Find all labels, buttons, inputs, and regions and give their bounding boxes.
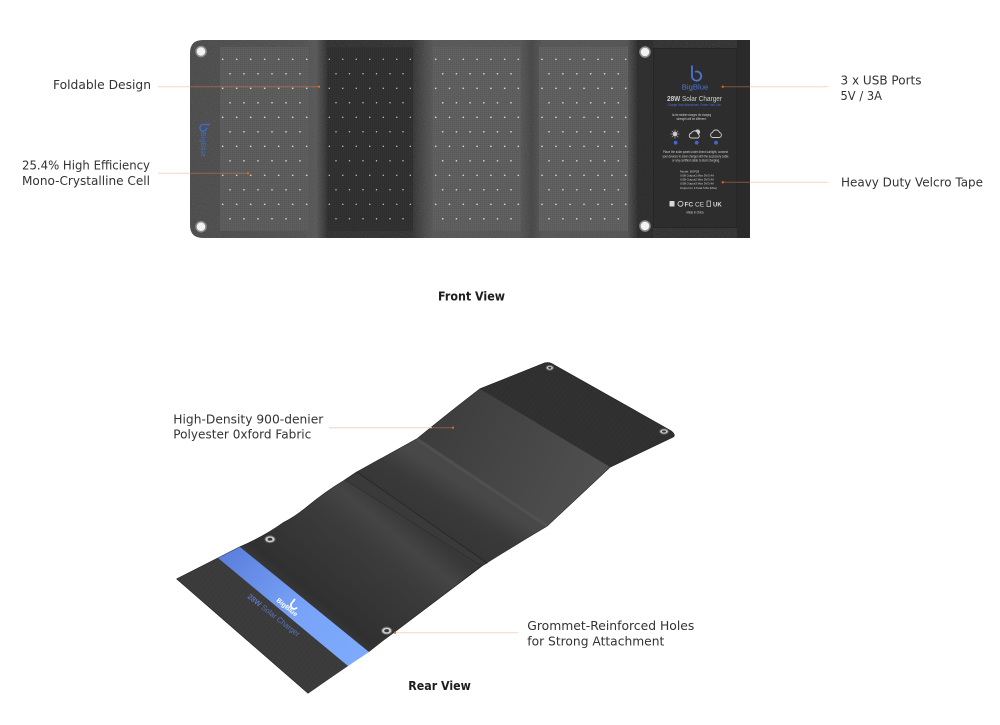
side logo: BigBlue: BigBlue [199, 132, 208, 157]
label note: As the weather changes, the charging [672, 113, 711, 117]
certification marks: CE [695, 202, 705, 208]
callout: USB ports [722, 72, 922, 103]
callout: velcro tape: Heavy Duty Velcro Tape [841, 175, 983, 190]
callout: cell efficiency [22, 157, 249, 188]
label logo: BigBlue [682, 82, 708, 91]
icon: partly cloudy [689, 129, 700, 145]
velcro tape label area [637, 40, 750, 238]
seam band [345, 472, 487, 566]
solar cell 2 [327, 47, 413, 231]
callout: cell efficiency: 25.4% High Efficiency [22, 157, 151, 172]
cell contact dots [222, 58, 627, 220]
callout: polyester fabric [173, 411, 454, 442]
callout: USB ports: 3 x USB Ports [840, 72, 922, 87]
label instructions: Place the solar panel under direct sunlight, connect [663, 150, 728, 154]
solar cell 3 [433, 47, 521, 231]
bottom section and hem [240, 480, 481, 652]
fold highlight [417, 439, 547, 526]
label logo [682, 66, 708, 91]
band text: 28W Solar Charger [246, 592, 302, 639]
icon: cloud [711, 130, 721, 145]
origin note: Made in China [686, 210, 704, 214]
certification marks [670, 201, 722, 208]
certification marks: FC [684, 202, 693, 208]
heading: rear view: Rear View [408, 679, 471, 693]
label instructions [662, 150, 729, 163]
label specifications: Output for 3 Total 5.8A (Max) [680, 186, 717, 190]
end strip [177, 558, 348, 693]
middle section [417, 389, 610, 526]
label specifications: USB Output1 Max 5V/3.4A [680, 174, 714, 178]
label instructions: or any certified cable to start charging. [672, 159, 720, 163]
callout: polyester fabric: Polyester 0xford Fabric [173, 427, 311, 442]
label note [672, 113, 711, 121]
panel: front view solar charger [190, 40, 750, 238]
blue band [218, 547, 369, 666]
solar cell 4 [539, 47, 628, 231]
callout: USB ports: 5V / 3A [840, 88, 882, 103]
top flap [480, 363, 674, 467]
callout: polyester fabric: High-Density 900-denier [173, 411, 324, 426]
callout: grommet holes [394, 618, 694, 649]
callout: foldable design: Foldable Design [53, 77, 151, 92]
rear body [177, 363, 674, 693]
side logo: BigBlue [199, 124, 210, 157]
label heading: 28W Solar Charger [667, 96, 723, 103]
label specifications: USB Output3 Max 5V/3.4A [680, 182, 714, 186]
icon: sun [670, 130, 680, 145]
panel: rear view solar charger [177, 363, 674, 693]
label tagline: Charge Your Adventures. Power Your Life. [668, 103, 722, 107]
certification marks: UK [713, 202, 722, 208]
solar cell 1 [220, 47, 309, 231]
label instructions: your devices to solar charger with the accessory cable [662, 154, 729, 158]
callout: cell efficiency: Mono-Crystalline Cell [22, 173, 150, 188]
callout: grommet holes: for Strong Attachment [527, 634, 664, 649]
panel body [190, 40, 750, 238]
callout: grommet holes: Grommet-Reinforced Holes [527, 618, 694, 633]
grommets [196, 46, 650, 232]
rear grommets [265, 366, 668, 634]
heading: front view: Front View [438, 290, 505, 304]
label specifications: Model: BSP28 [680, 170, 700, 174]
band logo: BigBlue [275, 597, 299, 619]
label specifications: USB Output2 Max 5V/3.4A [680, 178, 714, 182]
label note: strength will be different. [676, 117, 707, 121]
label specifications [680, 170, 717, 190]
lower section [357, 439, 547, 563]
